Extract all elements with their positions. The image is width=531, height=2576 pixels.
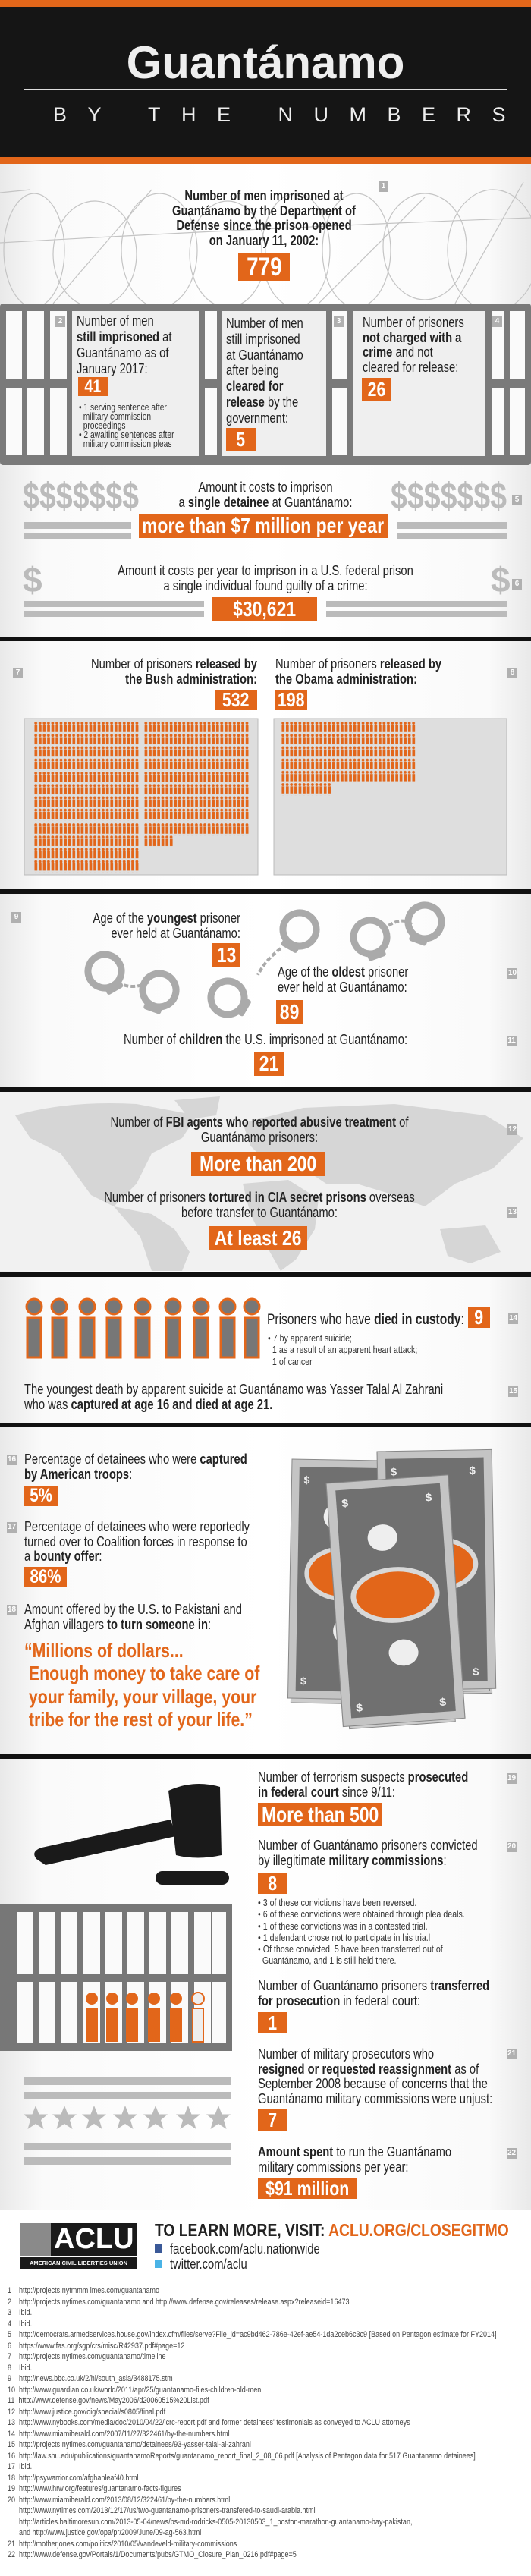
footnotes: 9 http://news.bbc.co.uk/2/hi/south_asia/3488175.stm [8,2374,173,2383]
release panels [24,719,507,875]
text: The youngest death by apparent suicide at Guantánamo was Yasser Talal Al Zahrani [24,1382,443,1397]
text: Percentage of detainees who were captured [24,1452,247,1467]
stat 1: on January 11, 2002: [209,232,319,247]
money stack [287,1449,496,1729]
learn more: TO LEARN MORE, VISIT: ACLU.ORG/CLOSEGITMO [155,2220,509,2240]
text: 19 [507,1774,516,1782]
stat cleared: after being [226,363,279,378]
text: Guantánamo, and 1 is still held there. [262,1955,397,1966]
ages: Age of the youngest prisoner [93,911,240,926]
text: 41 [85,376,101,396]
footnotes: 21 http://motherjones.com/politics/2010/05/vandeveld-military-commissions [8,2539,237,2548]
footnotes: 20 http://www.miamiherald.com/2013/08/12/322461/by-the-numbers.html, [8,2495,232,2504]
ACLU logo: AMERICAN CIVIL LIBERTIES UNION [30,2260,127,2266]
stat 3: Number of prisoners [363,315,464,330]
text: twitter.com/aclu [170,2257,247,2272]
stat 2: still imprisoned at [77,329,171,344]
stat 3 [363,315,464,375]
ages [93,911,240,941]
footnotes: 5 http://democrats.armedservices.house.gov/index.cfm/files/serve?File_id=ac9bd462-786e-42ef-ae54-1da2ceb6c3c9 [Based on Pentagon estimate for FY2014] [8,2330,497,2339]
text: Afghan villagers to turn someone in: [24,1616,211,1631]
text: 6 [515,580,519,588]
text: • 2 awaiting sentences after [79,429,174,440]
footnotes [8,2286,497,2559]
stat 3: cleared for release: [363,360,458,375]
dollar signs decor: $$$$$$$ [391,477,507,517]
footnotes: 22 http://www.defense.gov/Portals/1/Documents/pubs/GTMO_Closure_Plan_0216.pdf#page=5 [8,2550,297,2559]
footnotes: and http://www.justice.gov/opa/pr/2009/June/09-ag-563.html [19,2528,201,2537]
text: 86% [30,1566,61,1587]
text: • 3 of these convictions have been reversed. [258,1897,416,1908]
text: 12 [508,1125,517,1134]
stat 2: Guantánamo as of [77,345,168,360]
text: Amount offered by the U.S. to Pakistani and [24,1602,242,1617]
stat 1: Defense since the prison opened [176,218,352,233]
text: 13 [217,943,236,967]
text: At least 26 [215,1226,301,1250]
text: 198 [278,688,305,711]
text: 26 [368,378,385,401]
text: 17 [8,1523,16,1531]
text: 89 [280,1000,300,1023]
jail court [0,1904,232,2051]
text: before transfer to Guantánamo: [181,1205,338,1220]
text: a bounty offer: [24,1549,102,1564]
text: 1 [382,182,385,190]
stat 2: January 2017: [77,361,148,376]
text: • 1 serving sentence after [79,402,167,413]
footer white [0,2210,531,2576]
text: 779 [247,252,281,281]
footnotes: 14 http://www.miamiherald.com/2007/11/27/322461/by-the-numbers.html [8,2430,230,2439]
ACLU logo [20,2223,137,2269]
text: for prosecution in federal court: [258,1993,420,2008]
text: military commission [83,411,151,422]
text: resigned or requested reassignment as of [258,2061,479,2076]
text: 5% [30,1485,52,1506]
stat 1: Guantánamo by the Department of [172,203,356,219]
text: 5 [237,428,245,451]
text: $91 million [266,2176,349,2199]
text: Number of Guantánamo prisoners transferred [258,1978,489,1993]
text: Number of Guantánamo prisoners convicted [258,1838,478,1853]
cost stats [179,480,352,510]
text: the Obama administration: [275,671,417,686]
text: 7 [16,668,20,677]
footnotes: 2 http://projects.nytimes.com/guantanamo and http://www.defense.gov/releases/release.aspx?releaseid=16473 [8,2298,350,2307]
stat 3: not charged with a [363,329,461,344]
handcuffs [82,901,446,1024]
stat 3: crime and not [363,344,433,360]
text: 532 [222,688,250,711]
text: Age of the oldest prisoner [278,964,408,980]
text: military commissions per year: [258,2159,408,2175]
stat 2: Number of men [77,313,154,329]
text: • 1 of these convictions was in a contested trial. [258,1920,428,1932]
footnotes: 18 http://psywarrior.com/afghanleaf40.html [8,2474,138,2483]
text: turned over to Coalition forces in response to [24,1534,247,1549]
text: military commission pleas [83,439,171,449]
text: 15 [509,1387,517,1395]
text: 10 [508,969,517,977]
text: Number of prisoners tortured in CIA secret prisons overseas [104,1190,415,1205]
footnotes: 3 Ibid. [8,2308,32,2317]
text: • Of those convicted, 5 have been transferred out of [258,1943,443,1955]
text: by American troops: [24,1466,132,1481]
text: 18 [8,1606,16,1614]
text: 21 [259,1052,279,1075]
text: 1 of cancer [272,1356,313,1367]
quote: “Millions of dollars... [24,1639,184,1662]
text: proceedings [83,420,126,431]
footnotes: http://articles.baltimoresun.com/2013-05-04/news/bs-md-rodricks-0505-20130503_1_boston-marathon-guantanamo-bay-pakistan, [19,2518,412,2527]
footnotes: 8 Ibid. [8,2363,32,2372]
dollar signs decor: $ [491,560,511,599]
footnotes: 15 http://projects.nytimes.com/guantanamo/detainees/93-yasser-talal-al-zahrani [8,2440,251,2449]
cost stats: a single detainee at Guantánamo: [179,495,352,510]
text: 4 [495,317,499,326]
released: Number of prisoners released by [91,656,257,672]
text: facebook.com/aclu.nationwide [170,2241,320,2257]
text: Amount spent to run the Guantánamo [258,2144,451,2159]
released: the Bush administration: [125,671,257,686]
text: Number of military prosecutors who [258,2046,434,2062]
text: Guantánamo military commissions were unjust: [258,2091,492,2106]
text: ever held at Guantánamo: [278,979,407,994]
text: 9 [475,1306,483,1329]
text: More than 500 [262,1803,379,1826]
quote: Enough money to take care of [29,1662,259,1684]
text: Number of children the U.S. imprisoned at Guantánamo: [124,1032,407,1047]
text: 3 [337,317,341,326]
dollar signs decor [23,477,511,617]
stat 1 [172,188,356,248]
flag stripes and stars [24,2077,231,2165]
footnotes: 12 http://www.justice.gov/oig/special/s0805/final.pdf [8,2407,165,2416]
stat cleared: still imprisoned [226,332,300,347]
text: • 7 by apparent suicide; [268,1332,352,1344]
footnotes: 16 http://law.shu.edu/publications/guantanamoReports/guantanamo_report_final_2_08_06.pdf [Analysis of Pentagon data for 517 Guantanamo detainees] [8,2451,476,2460]
ages: ever held at Guantánamo: [111,926,240,941]
barbed wire [0,182,531,311]
quote: your family, your village, your [29,1685,256,1708]
quote [24,1639,259,1731]
footnotes: 17 Ibid. [8,2462,32,2471]
text: Number of prisoners released by [275,656,441,672]
map stats: Number of FBI agents who reported abusive treatment of [111,1115,408,1130]
gavel [34,1784,229,1885]
footnotes: 1 http://projects.nytmmm imes.com/guantanamo [8,2286,159,2295]
ACLU logo: ACLU [54,2223,134,2255]
dollar signs decor: $ [23,560,42,599]
footnotes: 4 Ibid. [8,2319,32,2328]
released [91,656,257,686]
text: 14 [509,1314,517,1323]
text: more than $7 million per year [142,514,385,537]
footnotes: 19 http://www.hrw.org/features/guantanamo-facts-figures [8,2484,181,2493]
map stats: Guantánamo prisoners: [201,1129,318,1144]
stat cleared: release by the [226,395,298,410]
court stats: Number of terrorism suspects prosecuted [258,1769,468,1785]
bounty [7,1455,17,1465]
stat cleared [226,316,303,426]
rules [0,637,531,641]
subtitle: BY THE NUMBERS [53,103,526,126]
text: 1 as a result of an apparent heart attack; [272,1344,417,1355]
footnotes: 7 http://projects.nytimes.com/guantanamo/timeline [8,2352,166,2361]
stat cleared: cleared for [226,379,283,394]
court stats [258,1769,468,1800]
text: 8 [511,668,514,677]
text: More than 200 [200,1152,317,1175]
text: $30,621 [234,597,296,621]
text: 9 [14,913,18,921]
stat 2 [77,313,171,376]
cost stats: Amount it costs to imprison [198,480,333,495]
footnotes: 13 http://www.nybooks.com/media/doc/2010/04/22/icrc-report.pdf and former detainees' testimonials as conveyed to ACLU attorneys [8,2418,410,2427]
map stats [111,1115,408,1145]
stat cleared: Number of men [226,316,303,331]
text: 21 [507,2049,516,2058]
footnotes: 11 http://www.defense.gov/news/May2006/d20060515%20List.pdf [8,2396,209,2405]
footnotes: 10 http://www.guardian.co.uk/world/2011/apr/25/guantanamo-files-children-old-men [8,2386,261,2395]
jail panel top [0,304,531,465]
text: 13 [508,1208,517,1216]
header [0,0,531,164]
text: 20 [507,1842,516,1851]
text: September 2008 because of concerns that the [258,2076,488,2091]
text: 8 [268,1871,277,1894]
dollar signs decor: $$$$$$$ [23,477,139,517]
text: who was captured at age 16 and died at age 21. [24,1396,272,1411]
text: 1 [268,2011,277,2033]
text: • 1 defendant chose not to participate in his tria.l [258,1932,430,1943]
text: 2 [58,317,62,326]
stat 1: Number of men imprisoned at [184,188,344,203]
people died [27,1299,259,1357]
text: 11 [507,1036,516,1045]
text: a single individual found guilty of a crime: [163,578,368,593]
stat cleared: government: [226,410,288,426]
died: Prisoners who have died in custody: [267,1312,464,1328]
text: 5 [515,495,519,504]
text: • 6 of these convictions were obtained through plea deals. [258,1908,465,1920]
stat cleared: at Guantánamo [226,348,303,363]
footnotes: http://www.nytimes.com/2013/12/17/us/two-guantanamo-prisoners-transfered-to-saudi-arabia.html [19,2506,316,2515]
bounty: 16 [8,1455,16,1464]
court stats: in federal court since 9/11: [258,1785,395,1800]
text: Percentage of detainees who were reportedly [24,1519,250,1534]
text: 22 [507,2149,516,2157]
text: by illegitimate military commissions: [258,1853,447,1868]
title: Guantánamo [127,37,404,88]
text: 7 [268,2108,277,2131]
text: Amount it costs per year to imprison in a U.S. federal prison [118,563,413,578]
quote: tribe for the rest of your life.” [29,1708,253,1731]
footnotes: 6 https://www.fas.org/sgp/crs/misc/R42937.pdf#page=12 [8,2342,184,2351]
world map [0,1092,531,1271]
